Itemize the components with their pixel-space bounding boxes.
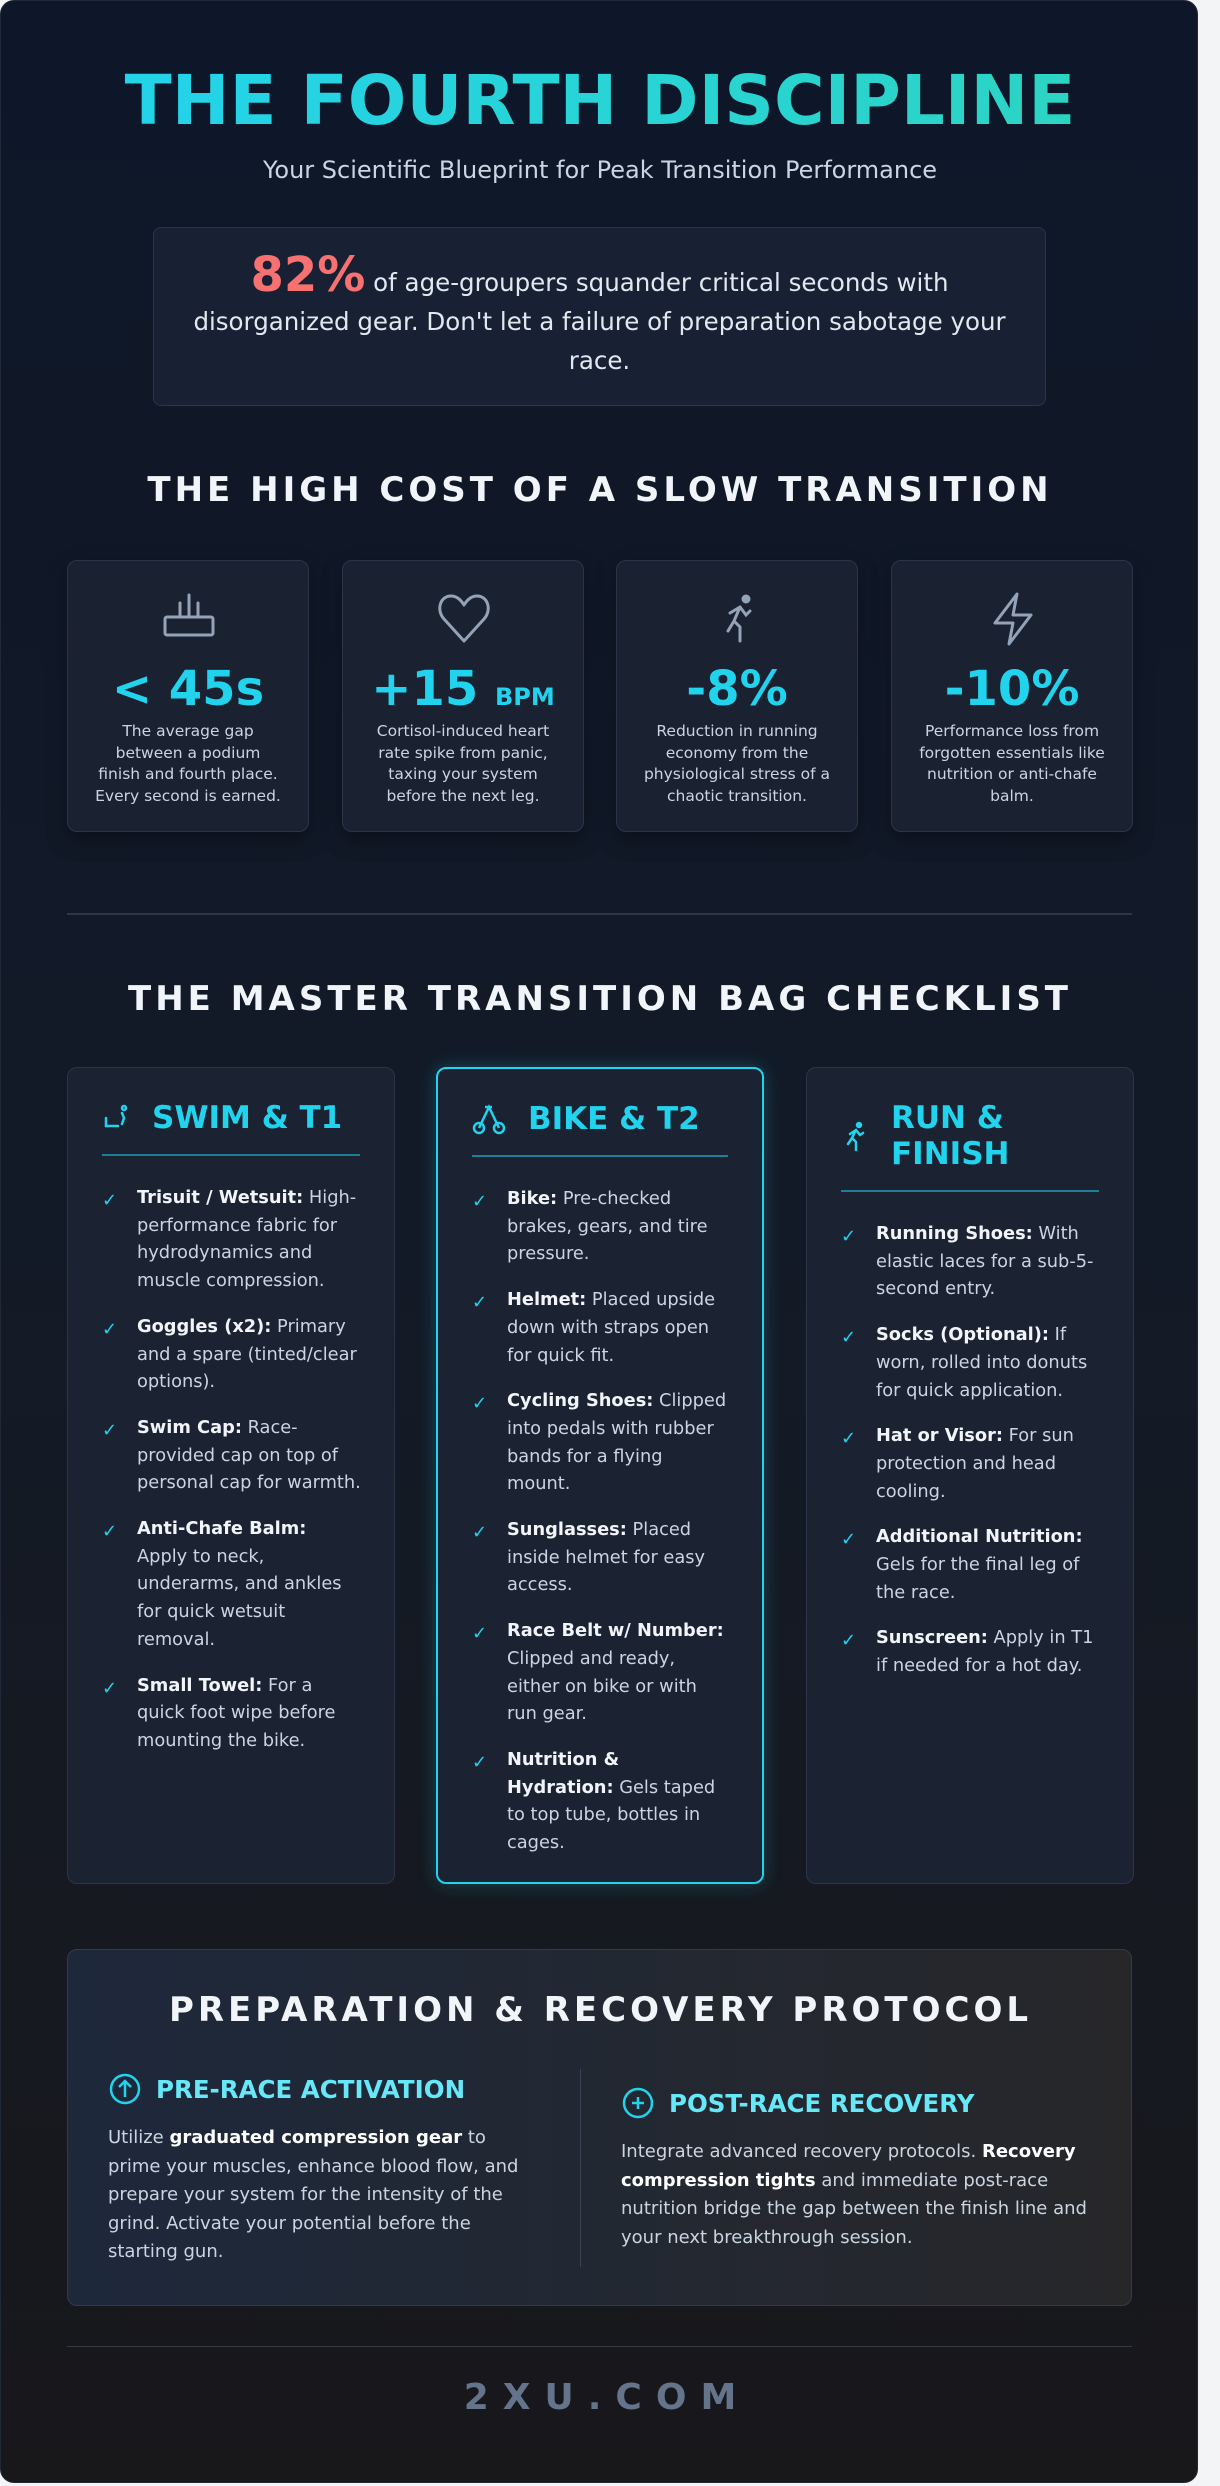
panel: run & finish: Sunscreen: Apply in T1 if needed for a hot day. [876, 1627, 1093, 1676]
stat card: bpm [342, 560, 584, 832]
stat card: -8%: -8% [686, 661, 788, 717]
heading: high cost: THE HIGH COST OF A SLOW TRANSITION [147, 470, 1053, 510]
block: post-race: Integrate advanced recovery protocols. Recovery compression tights and immediate post-race nutrition bridge the gap between the finish line and your next breakthrough session. [621, 2141, 1087, 2248]
stat card: 45s [67, 560, 309, 832]
panel: swim & t1: Apply to neck, underarms, and ankles for quick wetsuit removal. [137, 1546, 342, 1650]
stat card: -10%: -10% [945, 661, 1079, 717]
panel: run & finish: Socks (Optional): If worn, rolled into donuts for quick application. [876, 1324, 1087, 1401]
heading: checklist: THE MASTER TRANSITION BAG CHECKLIST [128, 979, 1072, 1019]
panel: run & finish: Hat or Visor: For sun protection and head cooling. [876, 1425, 1074, 1502]
panel: run & finish: Running Shoes: With elastic laces for a sub-5-second entry. [876, 1223, 1093, 1299]
protocol heading: PREPARATION & RECOVERY PROTOCOL [169, 1990, 1032, 2030]
panel: protocol [67, 1949, 1132, 2306]
panel: swim & t1: Small Towel: For a [137, 1675, 312, 1696]
subtitle: Your Scientific Blueprint for Peak Transition Performance [263, 156, 937, 184]
icon: runner [726, 594, 752, 642]
panel: bike & t2: Cycling Shoes: Clipped into pedals with rubber bands for a flying mount. [507, 1390, 726, 1494]
panel: bike & t2: Sunglasses: Placed inside helmet for easy access. [507, 1519, 705, 1595]
panel: bike & t2: Helmet: Placed upside down with straps open for quick fit. [507, 1289, 715, 1366]
title [1, 55, 1199, 147]
stat card: -10% [891, 560, 1133, 832]
title: THE FOURTH DISCIPLINE [125, 61, 1075, 141]
column header: run [841, 1100, 1099, 1192]
stat card: bpm: Cortisol-induced heart rate spike from panic, taxing your system before the next leg. [377, 722, 549, 805]
panel: bike & t2: Race Belt w/ Number: Clipped and ready, either on bike or with run gear. [507, 1620, 724, 1724]
column header: run: FINISH [891, 1136, 1009, 1172]
panel: swim & t1 [67, 1067, 395, 1884]
panel: swim & t1: quick foot wipe before mounting the bike. [137, 1702, 335, 1751]
column header: run: RUN & [891, 1100, 1004, 1136]
panel: run & finish: Additional Nutrition: Gels for the final leg of the race. [876, 1526, 1083, 1603]
stat card: 45s: The average gap between a podium finish and fourth place. Every second is earned. [95, 722, 281, 805]
block: post-race: POST-RACE RECOVERY [669, 2088, 974, 2118]
stat card: -8% [616, 560, 858, 832]
stat card: -10%: Performance loss from forgotten essentials like nutrition or anti-chafe balm. [919, 722, 1105, 805]
column header: bike [472, 1101, 728, 1157]
panel: bike & t2: Bike: Pre-checked brakes, gears, and tire pressure. [507, 1188, 708, 1264]
panel: bike & t2 [436, 1067, 764, 1884]
panel: swim & t1: Anti-Chafe Balm: [137, 1518, 306, 1539]
stat card: 45s: < 45s [112, 661, 264, 717]
icon: lightning [993, 592, 1033, 646]
stat card: -8%: Reduction in running economy from the physiological stress of a chaotic transition. [644, 722, 830, 805]
column header: swim [102, 1100, 360, 1156]
callout: 82% stat [153, 227, 1046, 406]
column header: swim: SWIM & T1 [152, 1100, 342, 1136]
block: pre-race: Utilize graduated compression gear to prime your muscles, enhance blood flow, and prepare your system for the intensity of the grind. Activate your potential before the starting gun. [108, 2127, 518, 2262]
panel: swim & t1: Swim Cap: Race-provided cap on top of personal cap for warmth. [137, 1417, 361, 1493]
footer brand: 2XU.COM [464, 2377, 750, 2418]
panel: swim & t1: Goggles (x2): Primary and a spare (tinted/clear options). [137, 1316, 357, 1392]
panel: bike & t2: Nutrition & Hydration: Gels taped to top tube, bottles in cages. [507, 1749, 715, 1853]
block: pre-race: PRE-RACE ACTIVATION [156, 2074, 465, 2104]
block: post-race [621, 2088, 1087, 2248]
stat card: bpm: +15 BPM [371, 661, 555, 717]
panel: run & finish [806, 1067, 1134, 1884]
icon: podium [164, 594, 214, 636]
icon: heart [438, 594, 490, 643]
panel: swim & t1: Trisuit / Wetsuit: High-performance fabric for hydrodynamics and muscle compression. [137, 1187, 356, 1291]
column header: bike: BIKE & T2 [528, 1101, 700, 1137]
callout: 82% stat: 82% of age-groupers squander critical seconds with disorganized gear. Don't let a failure of preparation sabotage your race. [193, 247, 1006, 375]
